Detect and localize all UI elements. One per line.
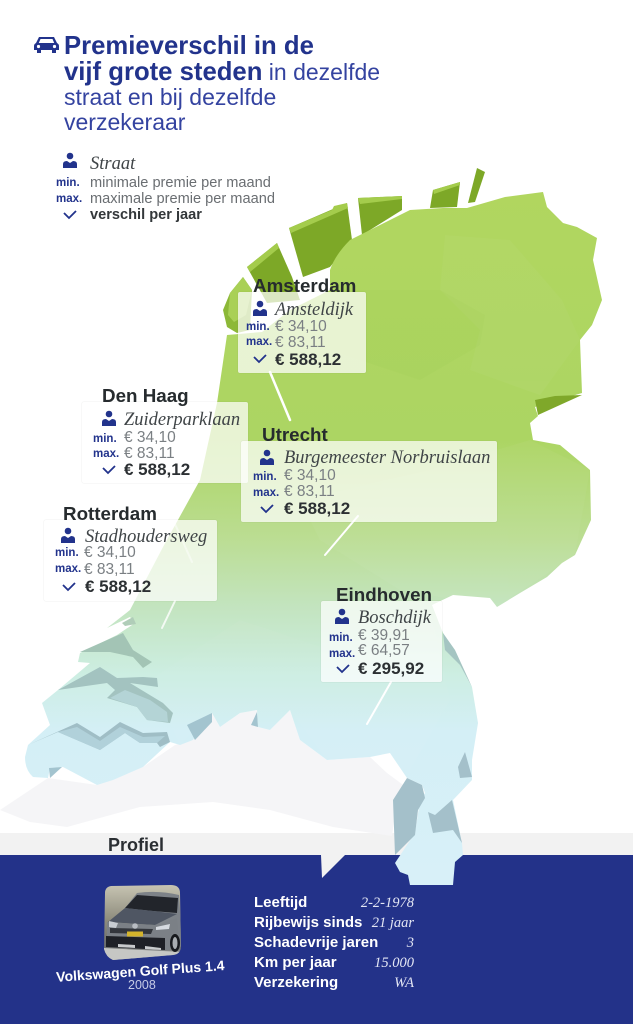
min value: € 34,10 [275,318,327,335]
profile table [254,894,414,991]
min: min. [253,471,277,483]
callout: Eindhoven [320,584,442,682]
headlights [109,921,118,928]
max: max. [253,487,279,499]
heading line 3: straat en bij dezelfde [64,84,276,110]
icon: person [63,152,77,168]
eastern IJsselmeer edge [535,395,582,415]
icon: person [253,300,267,316]
ground [104,948,180,960]
island: Vlieland [289,203,352,277]
city name: Utrecht [262,424,328,445]
legend min label: min. [56,177,80,189]
icon: check [260,504,274,514]
island: Terschelling [358,196,402,235]
street: Boschdijk [358,608,431,628]
street: Stadhoudersweg [85,527,207,547]
min value: € 34,10 [84,544,136,561]
row: Verzekering: Verzekering [254,974,338,991]
street: Amsteldijk [275,300,353,320]
car year: 2008 [128,978,156,992]
min value: € 34,10 [284,467,336,484]
value: Rijbewijs sinds: 21 jaar [372,915,414,931]
connector lines [157,372,391,724]
province tints [150,235,590,770]
max value: € 83,11 [284,483,335,500]
value: Km per jaar: 15.000 [374,955,414,971]
row: Schadevrije jaren: Schadevrije jaren [254,934,378,951]
title block [34,32,380,135]
island: Ameland [430,182,460,208]
difference: € 588,12 [284,499,350,518]
max value: € 83,11 [275,334,326,351]
legend max text: maximale premie per maand [90,191,275,207]
Limburg borders [393,633,472,855]
water and dark areas in the south-west [28,617,258,778]
legend difference text: verschil per jaar [90,207,202,223]
car name: Volkswagen Golf Plus 1.4 [56,957,225,985]
icon: person [61,528,75,543]
grille [110,928,153,934]
icon: check [62,582,76,592]
max: max. [55,563,81,575]
heading line 1: Premieverschil in de [64,32,314,60]
panel: profile band [0,855,633,1024]
bumper [106,936,165,950]
min: min. [246,321,270,333]
max value: € 64,57 [358,642,410,659]
icon: check [253,354,267,364]
max: max. [246,336,272,348]
max: max. [329,648,355,660]
max value: € 83,11 [84,561,135,578]
card [238,292,366,373]
delta water: Haringvliet [80,633,152,668]
city name: Amsterdam [253,275,356,296]
min: min. [93,433,117,445]
mainland [25,192,602,885]
wheel [170,934,180,952]
value: Verzekering: WA [394,975,414,991]
min: min. [329,632,353,644]
street: Burgemeester Norbruislaan [284,448,490,468]
icon: check [102,465,116,474]
callout: Amsterdam [238,275,366,374]
callout: Rotterdam [44,503,218,602]
icon: person [260,450,274,465]
heading line 4: verzekeraar [64,109,185,135]
legend [56,152,275,223]
difference: € 588,12 [124,460,190,479]
heading line 2: vijf grote steden in dezelfde [64,58,380,86]
plate [127,932,143,936]
icon: check [336,664,350,674]
city name: Rotterdam [63,503,157,524]
city name: Den Haag [102,385,189,406]
background bands [0,833,633,1024]
hood [108,908,177,925]
row: Rijbewijs sinds: Rijbewijs sinds [254,914,362,931]
legend max label: max. [56,193,82,205]
max value: € 83,11 [124,445,175,462]
difference: € 588,12 [275,350,341,369]
heading: Profiel: Profiel [108,835,164,855]
row: Km per jaar: Km per jaar [254,954,337,971]
legend street: Straat [90,154,135,174]
street: Zuiderparklaan [124,410,240,430]
callout: Den Haag [82,385,248,484]
min: min. [55,547,79,559]
icon: car [34,37,59,53]
row: Leeftijd: Leeftijd [254,894,307,911]
car photo [104,885,181,960]
windshield [125,895,178,913]
delta water: Westerschelde [28,722,170,750]
badge [132,923,138,929]
card [321,601,442,682]
island: Den Helder tip [223,277,252,333]
difference: € 588,12 [85,577,151,596]
icon: check [63,210,77,220]
island: Schiermonnikoog [468,168,485,203]
min value: € 34,10 [124,429,176,446]
icon: person [102,410,116,426]
difference: € 295,92 [358,659,424,678]
min value: € 39,91 [358,627,410,644]
legend min text: minimale premie per maand [90,175,271,191]
card [241,441,497,522]
island: Texel [247,243,300,303]
delta water: lighter layer [110,690,168,722]
value: Schadevrije jaren: 3 [407,935,414,951]
delta water: Oosterschelde [58,667,173,723]
max: max. [93,448,119,460]
Belgium shape [0,710,410,836]
callout: Utrecht [240,424,498,522]
card [82,402,248,483]
delta water: Westerschelde lighter layer [58,727,165,750]
Wadden islands [223,168,485,333]
speech bubble notch [321,855,345,878]
car roof and side [125,892,182,951]
value: Leeftijd: 2-2-1978 [361,895,414,911]
card [44,520,217,601]
city name: Eindhoven [336,584,432,605]
front [107,922,170,950]
icon: person [335,608,349,624]
